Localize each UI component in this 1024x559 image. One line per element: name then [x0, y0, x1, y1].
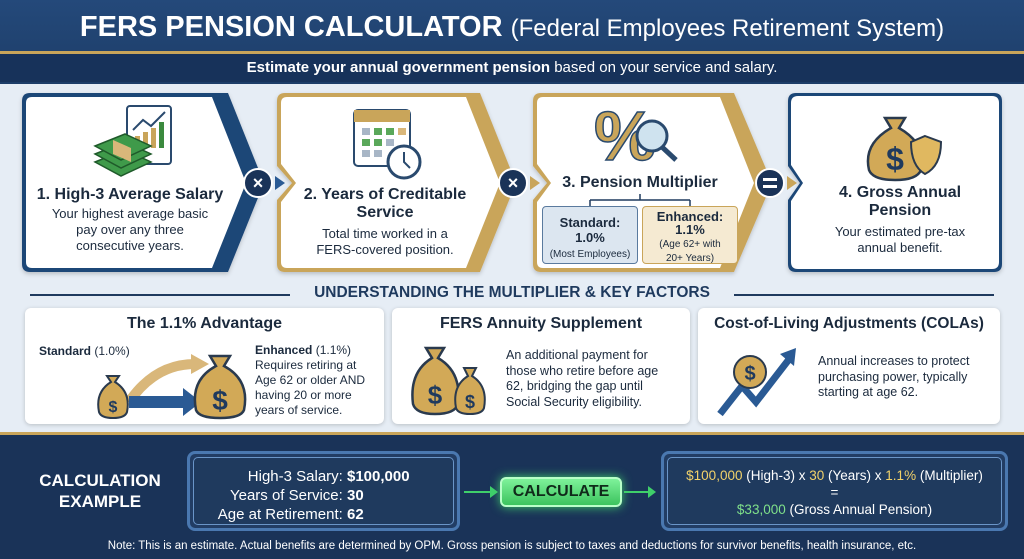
enhanced text: Enhanced (1.1%) [255, 343, 351, 357]
standard box [542, 206, 638, 264]
heading [304, 186, 466, 221]
card 2 [304, 109, 466, 257]
description: those who retire before age [506, 364, 658, 378]
description: pay over any three [76, 222, 184, 237]
calculation example label: CALCULATION [39, 471, 161, 490]
header band [0, 0, 1024, 84]
description [506, 348, 658, 408]
operator: times 1: × [253, 173, 263, 193]
icon: two bags [411, 346, 486, 416]
icon: bags arrows: $ [212, 385, 228, 416]
panel: 1.1% advantage: Standard (1.0%) [39, 344, 130, 358]
description: FERS-covered position. [316, 242, 454, 257]
description [818, 354, 970, 399]
description [316, 226, 454, 257]
description: An additional payment for [506, 348, 648, 362]
bottom band [0, 432, 1024, 559]
description [835, 224, 965, 255]
input box [187, 451, 460, 531]
heading: Pension [869, 202, 931, 219]
icon: coin arrow [717, 348, 796, 416]
input box: Years of Service: [230, 487, 343, 504]
description: annual benefit. [857, 240, 943, 255]
enhanced text: having 20 or more [255, 388, 352, 402]
calculation example label: EXAMPLE [59, 492, 141, 511]
result box: $33,000 (Gross Annual Pension) [737, 502, 932, 517]
icon: coin arrow: $ [744, 363, 756, 385]
icon: calendar clock [353, 109, 422, 180]
result box [661, 451, 1008, 531]
operator: times 2 [498, 168, 540, 198]
description: purchasing power, typically [818, 370, 967, 384]
heading: 2. Years of Creditable [304, 186, 466, 203]
standard box: Standard: [560, 215, 620, 230]
input box: 62 [347, 506, 364, 523]
panel heading: Cost-of-Living Adjustments (COLAs) [714, 315, 984, 332]
icon: two bags: $ [465, 392, 475, 412]
icon: money bag shield [866, 116, 942, 182]
card 1 [37, 105, 224, 253]
description: 62, bridging the gap until [506, 379, 643, 393]
input box: High-3 Salary: [248, 468, 343, 485]
input box: 30 [347, 487, 364, 504]
panel: 1.1% advantage [25, 308, 384, 424]
enhanced text: Requires retiring at [255, 358, 356, 372]
note: Note: This is an estimate. Actual benefits are determined by OPM. Gross pension is subject to taxes and deductions for survivor benefits, health insurance, etc. [108, 540, 916, 552]
calculate button [500, 477, 622, 507]
description: Your highest average basic [52, 206, 208, 221]
description: Annual increases to protect [818, 354, 969, 368]
heading: 1. High-3 Average Salary [37, 186, 223, 203]
input box: $100,000 [347, 468, 410, 485]
icon: bags arrows: $ [109, 399, 118, 416]
result box: = [831, 485, 838, 500]
enhanced text: years of service. [255, 403, 342, 417]
heading: Service [357, 204, 413, 221]
subtitle bar: Estimate your annual government pension based on your service and salary. [247, 59, 777, 76]
connector [589, 194, 691, 206]
heading: 3. Pension Multiplier [562, 174, 718, 191]
icon: money and chart [93, 105, 172, 177]
input box: Age at Retirement: [218, 506, 343, 523]
standard box: (Most Employees) [550, 249, 630, 260]
operator: times 1 [244, 168, 285, 198]
calculate button: CALCULATE [513, 483, 609, 500]
operator: times 2: × [508, 173, 518, 193]
panel: COLAs [698, 308, 1000, 424]
calculation example label [39, 471, 161, 511]
icon: money bag shield: $ [886, 141, 904, 177]
arrows and calculate button [464, 469, 656, 515]
enhanced box: (Age 62+ with [659, 239, 721, 250]
standard box: 1.0% [575, 230, 605, 245]
description: consecutive years. [76, 238, 184, 253]
panel heading: The 1.1% Advantage [127, 315, 282, 332]
enhanced text: Age 62 or older AND [255, 373, 365, 387]
enhanced box [642, 206, 738, 264]
description: Social Security eligibility. [506, 394, 642, 408]
description: starting at age 62. [818, 385, 918, 399]
result box: $100,000 (High-3) x 30 (Years) x 1.1% (Multiplier) [686, 468, 983, 483]
icon: two bags: $ [428, 380, 443, 410]
icon: bags arrows [97, 354, 246, 420]
enhanced box: 20+ Years) [666, 253, 714, 264]
enhanced box: 1.1% [675, 222, 705, 237]
title: FERS PENSION CALCULATOR (Federal Employees Retirement System) [80, 11, 944, 43]
enhanced box: Enhanced: [657, 209, 723, 224]
enhanced text [255, 343, 365, 417]
subtitle bar [0, 54, 1024, 82]
panel heading: FERS Annuity Supplement [440, 315, 642, 332]
heading: 4. Gross Annual [839, 184, 961, 201]
card 4 [835, 116, 965, 255]
panel: annuity supplement [392, 308, 690, 424]
description: Total time worked in a [322, 226, 448, 241]
operator: equals [755, 168, 797, 198]
description [52, 206, 208, 253]
description: Your estimated pre-tax [835, 224, 965, 239]
card 3 [542, 98, 738, 264]
heading [839, 184, 961, 219]
section heading: UNDERSTANDING THE MULTIPLIER & KEY FACTORS [314, 284, 710, 301]
